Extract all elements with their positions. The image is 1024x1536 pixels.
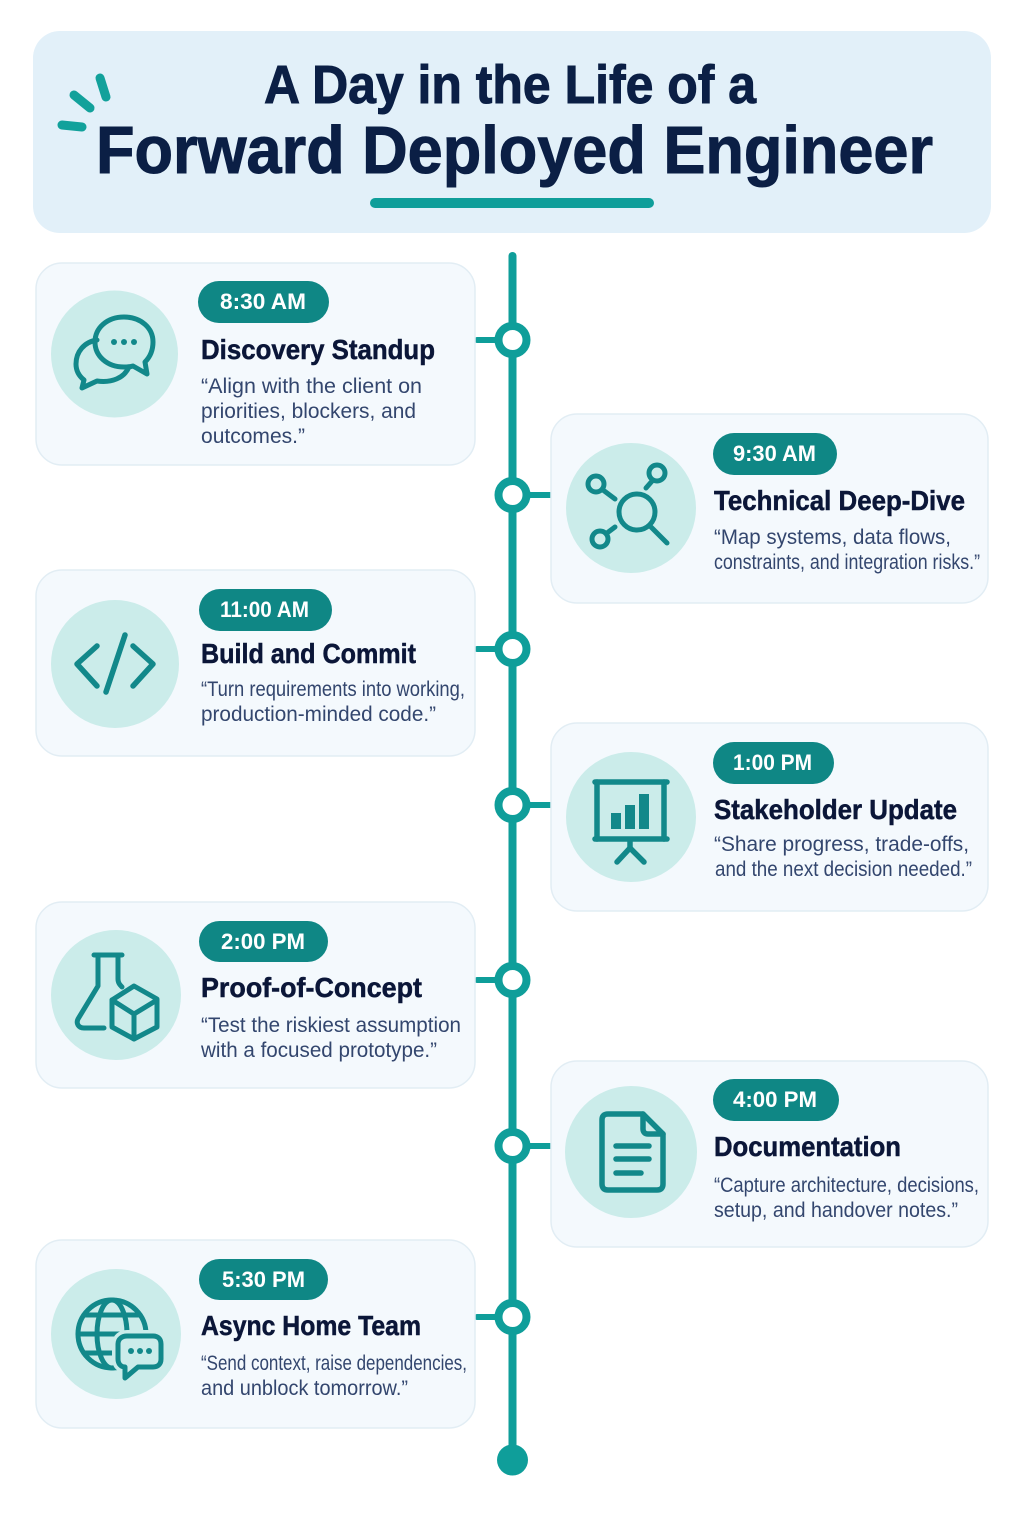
card title: Proof-of-Concept xyxy=(201,972,422,1003)
time badge xyxy=(199,589,332,631)
title underline xyxy=(370,198,654,208)
timeline end dot xyxy=(497,1444,528,1476)
title: A Day in the Life of a xyxy=(264,55,757,115)
time badge: 4:00 PM xyxy=(733,1087,817,1112)
icon: flask and cube xyxy=(77,955,157,1039)
time badge: 8:30 AM xyxy=(220,289,306,314)
connector and node: 8:30 AM xyxy=(477,326,526,354)
timeline xyxy=(477,256,550,1476)
connector and node: 5:30 PM xyxy=(477,1303,526,1331)
time badge xyxy=(713,1079,839,1121)
time badge xyxy=(713,433,837,475)
panel: Stakeholder Update xyxy=(551,723,988,911)
title xyxy=(96,55,933,188)
card quote xyxy=(714,526,980,574)
connector and node: 4:00 PM xyxy=(498,1132,550,1160)
card title: Documentation xyxy=(714,1131,901,1162)
card quote xyxy=(201,1352,467,1400)
card quote: “Capture architecture, decisions, xyxy=(714,1174,979,1197)
icon: accent sparks xyxy=(62,78,106,127)
time badge xyxy=(199,921,328,962)
icon: presentation board xyxy=(595,782,667,862)
card quote: and unblock tomorrow.” xyxy=(201,1377,408,1400)
panel: Documentation xyxy=(551,1061,988,1247)
panel: Build and Commit xyxy=(36,570,475,756)
time badge: 9:30 AM xyxy=(733,441,816,466)
header banner xyxy=(33,31,991,233)
icon: code brackets xyxy=(77,635,153,692)
card quote: with a focused prototype.” xyxy=(200,1039,437,1062)
card quote: priorities, blockers, and xyxy=(201,400,416,423)
panel: Technical Deep-Dive xyxy=(551,414,988,603)
card title: Async Home Team xyxy=(201,1310,421,1341)
card quote: production-minded code.” xyxy=(201,703,436,726)
card quote xyxy=(714,1174,979,1222)
card quote: “Turn requirements into working, xyxy=(201,678,465,701)
card quote xyxy=(201,678,465,726)
time badge: 1:00 PM xyxy=(733,750,812,775)
time badge: 11:00 AM xyxy=(220,597,309,622)
card quote: “Map systems, data flows, xyxy=(714,526,951,549)
connector and node: 9:30 AM xyxy=(498,481,550,509)
panel: Async Home Team xyxy=(36,1240,475,1428)
card quote: constraints, and integration risks.” xyxy=(714,551,980,574)
card quote: setup, and handover notes.” xyxy=(714,1199,958,1222)
card title: Stakeholder Update xyxy=(714,794,957,825)
icon: chat bubbles xyxy=(76,317,153,388)
title: Forward Deployed Engineer xyxy=(96,113,933,188)
card title: Technical Deep-Dive xyxy=(714,485,965,516)
card quote: outcomes.” xyxy=(201,425,305,448)
connector and node: 11:00 AM xyxy=(477,635,526,663)
icon: document xyxy=(602,1114,663,1190)
time badge xyxy=(199,1259,328,1300)
connector and node: 2:00 PM xyxy=(477,966,526,994)
card quote: “Test the riskiest assumption xyxy=(201,1014,461,1037)
card quote: “Share progress, trade-offs, xyxy=(714,833,969,856)
panel: Proof-of-Concept xyxy=(36,902,475,1088)
time badge: 2:00 PM xyxy=(221,929,305,954)
card quote xyxy=(200,1014,461,1062)
card quote: “Send context, raise dependencies, xyxy=(201,1352,467,1375)
icon: globe and chat xyxy=(78,1300,161,1378)
card title: Build and Commit xyxy=(201,638,416,669)
card quote xyxy=(201,375,422,448)
card quote: and the next decision needed.” xyxy=(715,858,972,881)
icon: magnifier network xyxy=(588,465,667,547)
time badge xyxy=(198,281,329,323)
card quote xyxy=(714,833,972,881)
time badge xyxy=(713,742,834,784)
card title: Discovery Standup xyxy=(201,334,435,365)
panel: Discovery Standup xyxy=(36,263,475,465)
card quote: “Align with the client on xyxy=(201,375,422,398)
connector and node: 1:00 PM xyxy=(498,791,550,819)
time badge: 5:30 PM xyxy=(222,1267,305,1292)
